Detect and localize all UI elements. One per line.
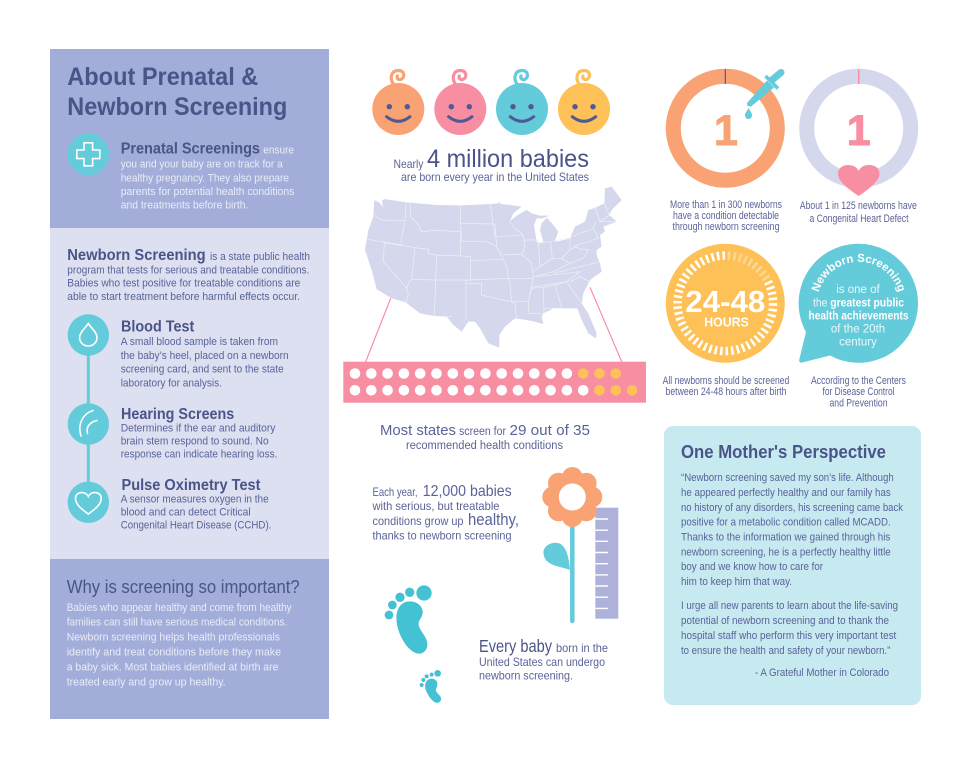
caption: cdc [811,375,906,410]
quote text: no history of any disorders, his screening came back [681,502,903,514]
icon: dropper [745,72,781,119]
text: every baby: Every baby [479,636,552,656]
text: why screening body: Newborn screening helps health professionals [67,631,280,643]
quote text: he appeared perfectly healthy and our family has [681,487,891,499]
caption: 24-48 hours: between 24-48 hours after birth [666,386,786,398]
text: newborn screening intro: is a state public health [210,251,310,263]
text: 12,000 babies: with serious, but treatable [372,499,500,513]
text: prenatal screenings: you and your baby are on track for a [121,158,284,170]
text: most states: 29 out of 35 [510,422,590,439]
text: newborn screening intro: Babies who test positive for treatable conditions are [67,278,300,290]
icon: flower [542,467,602,621]
text: 12,000 babies [372,483,519,542]
stat: 1 in 300 ring: 1 [714,107,738,155]
caption: cdc: and Prevention [830,398,888,410]
caption: 1 in 125: a Congenital Heart Defect [810,213,908,225]
quote text: I urge all new parents to learn about the life-saving [681,600,898,612]
band of dots [343,362,646,403]
text: blood test: the baby’s heel, placed on a newborn [121,350,289,362]
icon: yellow baby [558,70,610,135]
text: 12,000 babies: thanks to newborn screening [372,528,512,542]
panel: why is screening so important [50,559,329,719]
text: most states: recommended health conditions [406,440,563,452]
text: hearing screens: Hearing Screens [121,406,234,423]
speech bubble: public health achievement: health achievements [808,310,908,322]
text: prenatal screenings: and treatments before birth. [121,200,248,212]
text: hearing screens: Determines if the ear and auditory [121,423,276,435]
caption: 1 in 125: About 1 in 125 newborns have [800,200,917,212]
heading: one mother's perspective: One Mother's Perspective [681,442,886,462]
title: About Prenatal & [67,63,258,91]
text: every baby [479,636,608,682]
caption: 24-48 hours: All newborns should be screened [663,375,789,387]
text: prenatal screenings: ensure [263,144,294,156]
text: why screening body: families can still have serious medical conditions. [67,617,287,629]
text: prenatal screenings: parents for potential health conditions [121,186,295,198]
icon: small footprint [420,670,441,703]
speech bubble: public health achievement: Newborn Screening [811,254,904,292]
panel: about prenatal screening [50,49,329,228]
icon: pink baby [434,70,486,135]
callout lines [366,287,622,362]
icon: teal baby [496,70,548,135]
text: 4 million babies [394,145,589,184]
text: pulse oximetry test: Pulse Oximetry Test [122,477,260,494]
heading: why screening: Why is screening so important? [67,577,300,597]
text: most states [380,422,590,452]
text: why screening body [67,602,292,688]
text: 12,000 babies: Each year, [372,485,418,499]
quote text: newborn screening, he is a perfectly healthy little [681,546,891,558]
text: 12,000 babies: 12,000 babies [423,483,512,500]
icon: medical cross [67,133,109,175]
text: every baby: born in the [556,641,608,655]
quote text: boy and we know how to care for [681,561,823,573]
stat: 24-48 hours: HOURS [704,315,749,330]
caption: 24-48 hours [663,375,789,398]
quote text: to ensure the health and safety of your newborn.” [681,645,891,657]
quote text: positive for a metabolic condition called MCADD. [681,517,891,529]
chart: us map with newborn dots [343,187,646,403]
caption: cdc: for Disease Control [822,386,894,398]
icon: blood drop [68,314,109,356]
text: blood test: Blood Test [121,318,194,335]
text: prenatal screenings: Prenatal Screenings [121,140,260,157]
text: 12,000 babies: conditions grow up [372,514,464,528]
stat: 1 in 125 ring: 1 [847,107,871,155]
quote text: him to keep him that way. [681,576,792,588]
text: pulse oximetry test: A sensor measures oxygen in the [121,493,269,505]
text: newborn screening intro [67,247,310,303]
text: newborn screening intro: able to start treatment before harmful effects occur. [67,291,300,303]
icon: large footprint [385,585,432,654]
us map [365,187,622,348]
caption: 1 in 300: have a condition detectable [673,210,779,222]
speech bubble: public health achievement: of the 20th [831,324,885,336]
speech bubble: public health achievement [798,244,918,410]
stat: 24-48 hours [663,244,789,398]
text: blood test [121,318,289,390]
speech bubble: public health achievement: the greatest public [813,298,905,310]
text: every baby: United States can undergo [479,655,605,669]
text: blood test: laboratory for analysis. [121,378,222,390]
speech bubble: public health achievement: is one of [836,284,881,296]
text: prenatal screenings [121,140,295,212]
text: why screening body: treated early and grow up healthy. [67,676,226,688]
quote text: - A Grateful Mother in Colorado [755,667,889,679]
text: pulse oximetry test: Congenital Heart Disease (CCHD). [121,520,271,532]
text: pulse oximetry test [121,477,271,532]
icon: heart [838,165,880,196]
connector line [87,335,90,502]
stat: 1 in 125 ring [800,69,917,225]
icon: heart outline [68,482,109,523]
caption: cdc: According to the Centers [811,375,906,387]
text: newborn screening intro: program that tests for serious and treatable conditions. [67,264,309,276]
text: 4 million babies: 4 million babies [427,145,589,173]
text: most states: screen for [459,426,506,438]
text: every baby: newborn screening. [479,668,573,682]
panel: one mother's perspective [664,426,921,705]
quote text: hospital staff who perform this very important test [681,630,896,642]
quote text: potential of newborn screening and to thank the [681,615,889,627]
text: pulse oximetry test: blood and can detect Critical [121,507,251,519]
caption: 1 in 300: through newborn screening [672,221,780,233]
caption: 1 in 300 [670,199,782,233]
text: why screening body: Babies who appear healthy and come from healthy [67,602,292,614]
text: blood test: screening card, and sent to the state [121,364,284,376]
quote text: “Newborn screening saved my son’s life. Although [681,472,894,484]
text: hearing screens: response can indicate hearing loss. [121,448,277,460]
icon: orange baby [372,70,424,135]
text: hearing screens: brain stem respond to sound. No [121,435,269,447]
quote text [681,472,903,679]
text: 12,000 babies: healthy, [468,510,519,529]
text: 4 million babies: Nearly [394,157,424,171]
text: why screening body: identify and treat conditions before they make [67,646,281,658]
text: blood test: A small blood sample is taken from [121,336,278,348]
title [67,63,287,121]
text: hearing screens [121,406,277,460]
text: newborn screening intro: Newborn Screening [67,247,206,264]
text: most states: Most states [380,422,456,439]
quote text: Thanks to the information we gained through his [681,532,891,544]
text: prenatal screenings: healthy pregnancy. They also prepare [121,172,289,184]
stat: 24-48 hours: 24-48 [685,284,765,319]
stat: 1 in 300 ring [670,69,782,233]
title: Newborn Screening [67,93,287,121]
caption: 1 in 300: More than 1 in 300 newborns [670,199,782,211]
speech bubble: public health achievement: century [839,336,877,348]
icon: growth ruler [595,508,618,619]
caption: 1 in 125 [800,200,917,225]
text: 4 million babies: are born every year in the United States [401,170,589,184]
text: why screening body: a baby sick. Most babies identified at birth are [67,661,278,673]
panel: newborn screening [50,228,329,559]
icon: sound waves [68,403,109,445]
